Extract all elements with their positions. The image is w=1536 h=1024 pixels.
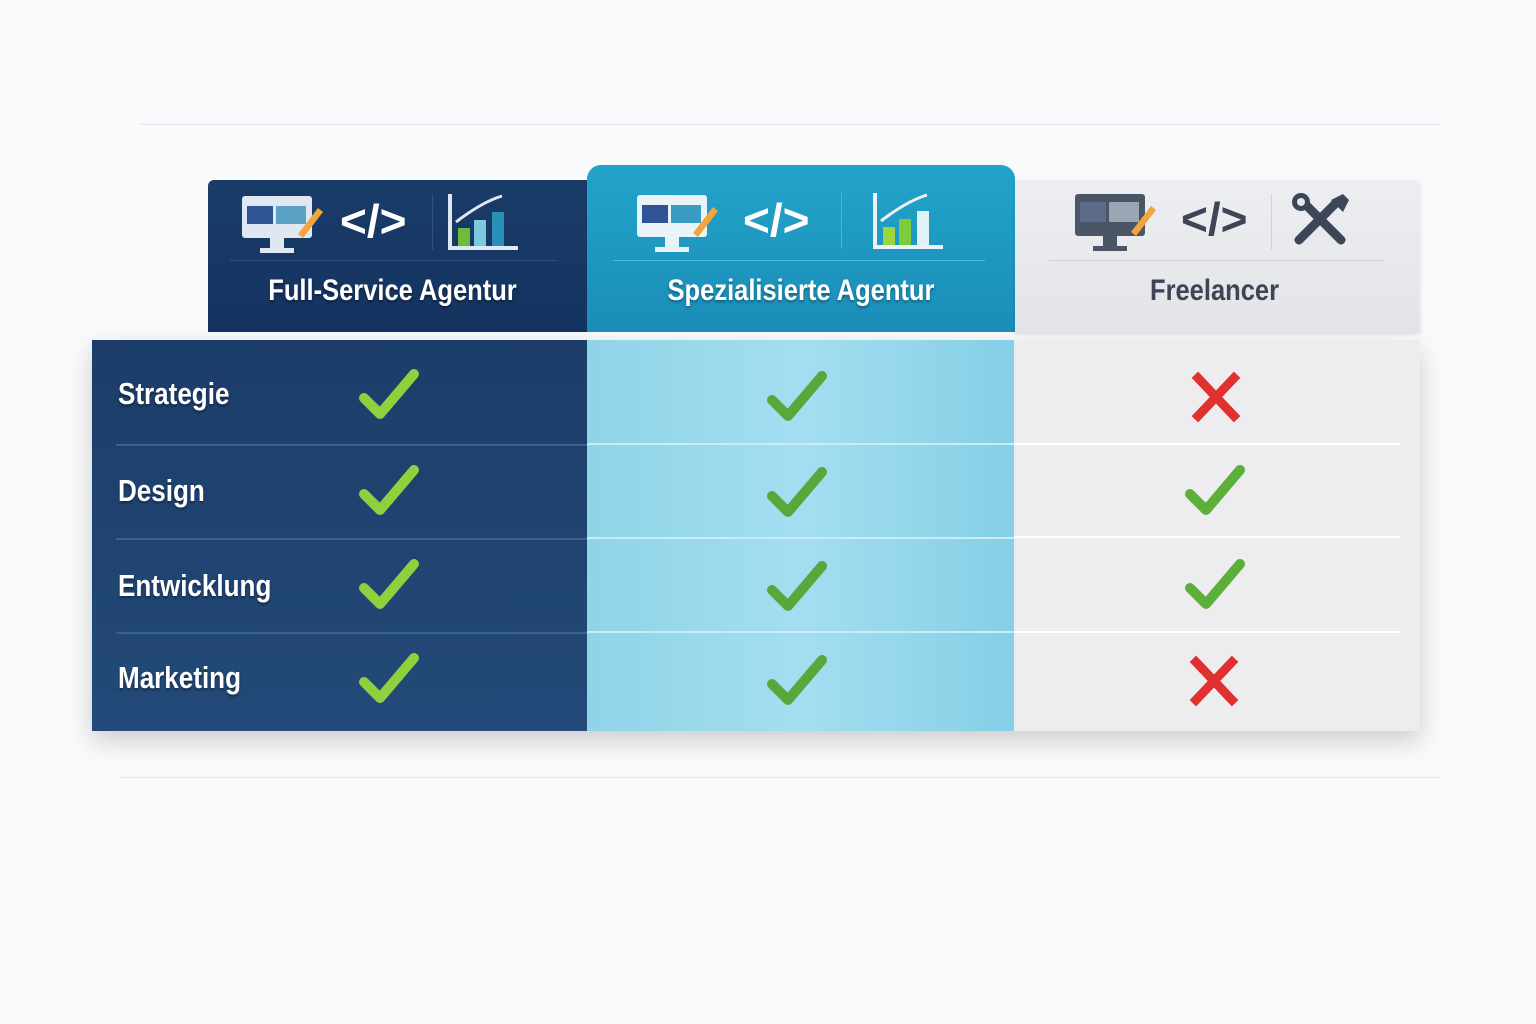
body column: Freelancer: [1014, 340, 1420, 731]
row label: Marketing: Marketing: [118, 660, 241, 695]
icon: code: </>: [1181, 193, 1248, 245]
header: Spezialisierte Agentur: [587, 165, 1015, 332]
row label: Design: Design: [118, 473, 205, 508]
icon: code: </>: [743, 194, 810, 246]
body column: Spezialisierte: [587, 340, 1014, 731]
icon: monitor with brush: [1075, 194, 1156, 251]
table shadow: [92, 340, 1420, 731]
row label: Entwicklung: Entwicklung: [118, 568, 271, 603]
header: Freelancer: Freelancer: [1150, 274, 1279, 307]
icon: chart: [448, 194, 518, 250]
checks col2: [767, 371, 827, 421]
icon: monitor with brush: [637, 195, 718, 252]
body column: Full-Service: [92, 340, 587, 731]
icon: monitor with brush: [242, 196, 323, 253]
icon: code: </>: [340, 195, 407, 247]
header: Full-Service Agentur: [208, 180, 587, 332]
icon: chart: [873, 193, 943, 249]
header: Spezialisierte Agentur: Spezialisierte Agentur: [668, 274, 934, 307]
checks col1: [359, 369, 419, 419]
col3 marks: [1192, 372, 1240, 422]
header: Full-Service Agentur: Full-Service Agentur: [268, 274, 517, 307]
header: Freelancer: [1015, 180, 1420, 332]
icon: tools: [1292, 193, 1349, 244]
row label: Strategie: Strategie: [118, 376, 229, 411]
